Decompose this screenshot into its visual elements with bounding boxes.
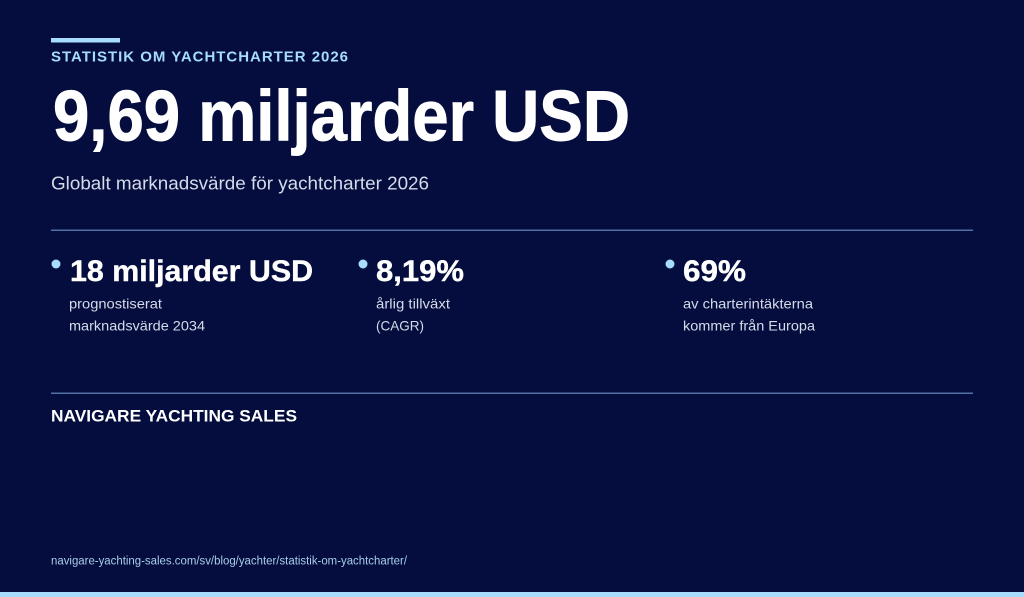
stat description: årlig tillväxt <box>376 296 450 312</box>
stat: 69% <box>666 255 815 334</box>
main headline figure: 9,69 miljarder USD <box>53 78 630 156</box>
bullet dot <box>666 260 674 268</box>
brand name: NAVIGARE YACHTING SALES <box>51 406 297 426</box>
stat description: av charterintäkterna <box>683 296 813 312</box>
stat description: (CAGR) <box>376 318 424 334</box>
stat: 8,19% <box>358 255 464 334</box>
stat value: 69% <box>683 255 746 288</box>
stat description <box>376 296 450 334</box>
source url: navigare-yachting-sales.com/sv/blog/yachter/statistik-om-yachtcharter/ <box>51 556 408 568</box>
stat description: marknadsvärde 2034 <box>69 318 205 334</box>
stat description: kommer från Europa <box>683 318 815 334</box>
eyebrow label: STATISTIK OM YACHTCHARTER 2026 <box>51 48 348 66</box>
header accent bar <box>51 38 120 42</box>
headline subtitle: Globalt marknadsvärde för yachtcharter 2026 <box>51 174 429 194</box>
bullet dot <box>358 260 368 268</box>
stat description: prognostiserat <box>69 296 162 312</box>
bullet dot <box>52 260 60 268</box>
stat value: 18 miljarder USD <box>70 255 313 288</box>
bottom accent bar <box>0 592 1024 597</box>
stat description <box>69 296 205 334</box>
stat description <box>683 296 815 334</box>
stat value: 8,19% <box>376 255 464 288</box>
stat: 18 miljarder USD <box>52 255 313 334</box>
